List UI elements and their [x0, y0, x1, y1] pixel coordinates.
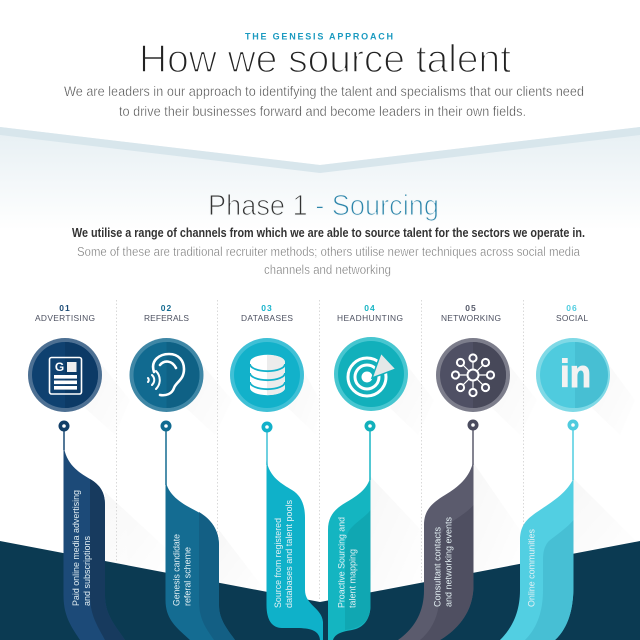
label 03 databases: 03	[261, 303, 273, 313]
label 05 networking	[441, 303, 501, 323]
background chevron band	[0, 127, 640, 230]
label 02 referals: REFERALS	[144, 313, 189, 323]
ribbon with text: Paid online media advertising	[71, 490, 82, 606]
icon: linkedin	[536, 338, 610, 412]
column 6: social	[500, 303, 610, 640]
label 06 social: SOCIAL	[556, 313, 588, 323]
label 03 databases: DATABASES	[241, 313, 293, 323]
ribbon with text	[262, 422, 323, 640]
long shadows	[85, 350, 640, 592]
ribbon with text: Consultant contacts	[432, 527, 444, 607]
icon: database	[230, 338, 304, 412]
intro text	[64, 83, 584, 119]
ribbon with text: and subscriptions	[82, 536, 93, 606]
ribbon with text: databases and talent pools	[284, 500, 295, 608]
title: How we source talent	[139, 38, 511, 81]
label 04 headhunting: HEADHUNTING	[337, 313, 403, 323]
label 01 advertising	[35, 303, 95, 323]
ribbon with text	[398, 420, 478, 640]
phase description: Some of these are traditional recruiter methods; others utilise newer techniques across social media	[77, 245, 580, 259]
label 01 advertising: 01	[59, 303, 71, 313]
ribbon with text: talent mapping	[348, 549, 358, 608]
ribbon with text	[500, 420, 578, 640]
column 4: headhunting	[328, 303, 408, 640]
ribbon with text	[58, 420, 125, 640]
icon: linkedin: in	[560, 353, 591, 396]
column 5: networking	[398, 303, 510, 640]
ribbon with text: Genesis candidate	[172, 534, 182, 606]
icon: target	[334, 337, 408, 411]
column 3: databases	[230, 303, 323, 640]
column 2: referals	[130, 303, 235, 640]
column 1: advertising	[28, 303, 125, 640]
ribbon with text: Proactive Sourcing and	[336, 517, 348, 608]
label 05 networking: 05	[465, 303, 477, 313]
icon: network	[436, 338, 510, 412]
icon: ear	[130, 338, 204, 412]
eyebrow heading: THE GENESIS APPROACH	[245, 32, 393, 42]
label 04 headhunting	[337, 303, 403, 323]
label 04 headhunting: 04	[364, 303, 376, 313]
icon: newspaper	[28, 338, 102, 412]
label 01 advertising: ADVERTISING	[35, 313, 95, 323]
label 06 social	[556, 303, 588, 323]
dark base shape	[0, 541, 640, 640]
intro text: We are leaders in our approach to identifying the talent and specialisms that our clients need	[64, 83, 584, 99]
icon: newspaper: G	[55, 360, 64, 374]
label 06 social: 06	[566, 303, 578, 313]
phase description: channels and networking	[264, 263, 391, 277]
ribbon with text: and networking events	[444, 517, 454, 607]
phase description	[77, 245, 580, 277]
label 05 networking: NETWORKING	[441, 313, 501, 323]
label 02 referals: 02	[161, 303, 172, 313]
label 02 referals	[144, 303, 189, 323]
label 03 databases	[241, 303, 293, 323]
ribbon with text	[328, 420, 376, 640]
column dividers	[116, 300, 524, 600]
ribbon with text: Source from registered	[273, 518, 284, 608]
vertical caption: Online communities	[526, 529, 538, 607]
ribbon with text	[160, 420, 235, 640]
ribbon with text: referal scheme	[182, 547, 194, 606]
intro text: to drive their businesses forward and become leaders in their own fields.	[119, 103, 526, 119]
phase heading: Phase 1 - Sourcing	[208, 190, 439, 222]
